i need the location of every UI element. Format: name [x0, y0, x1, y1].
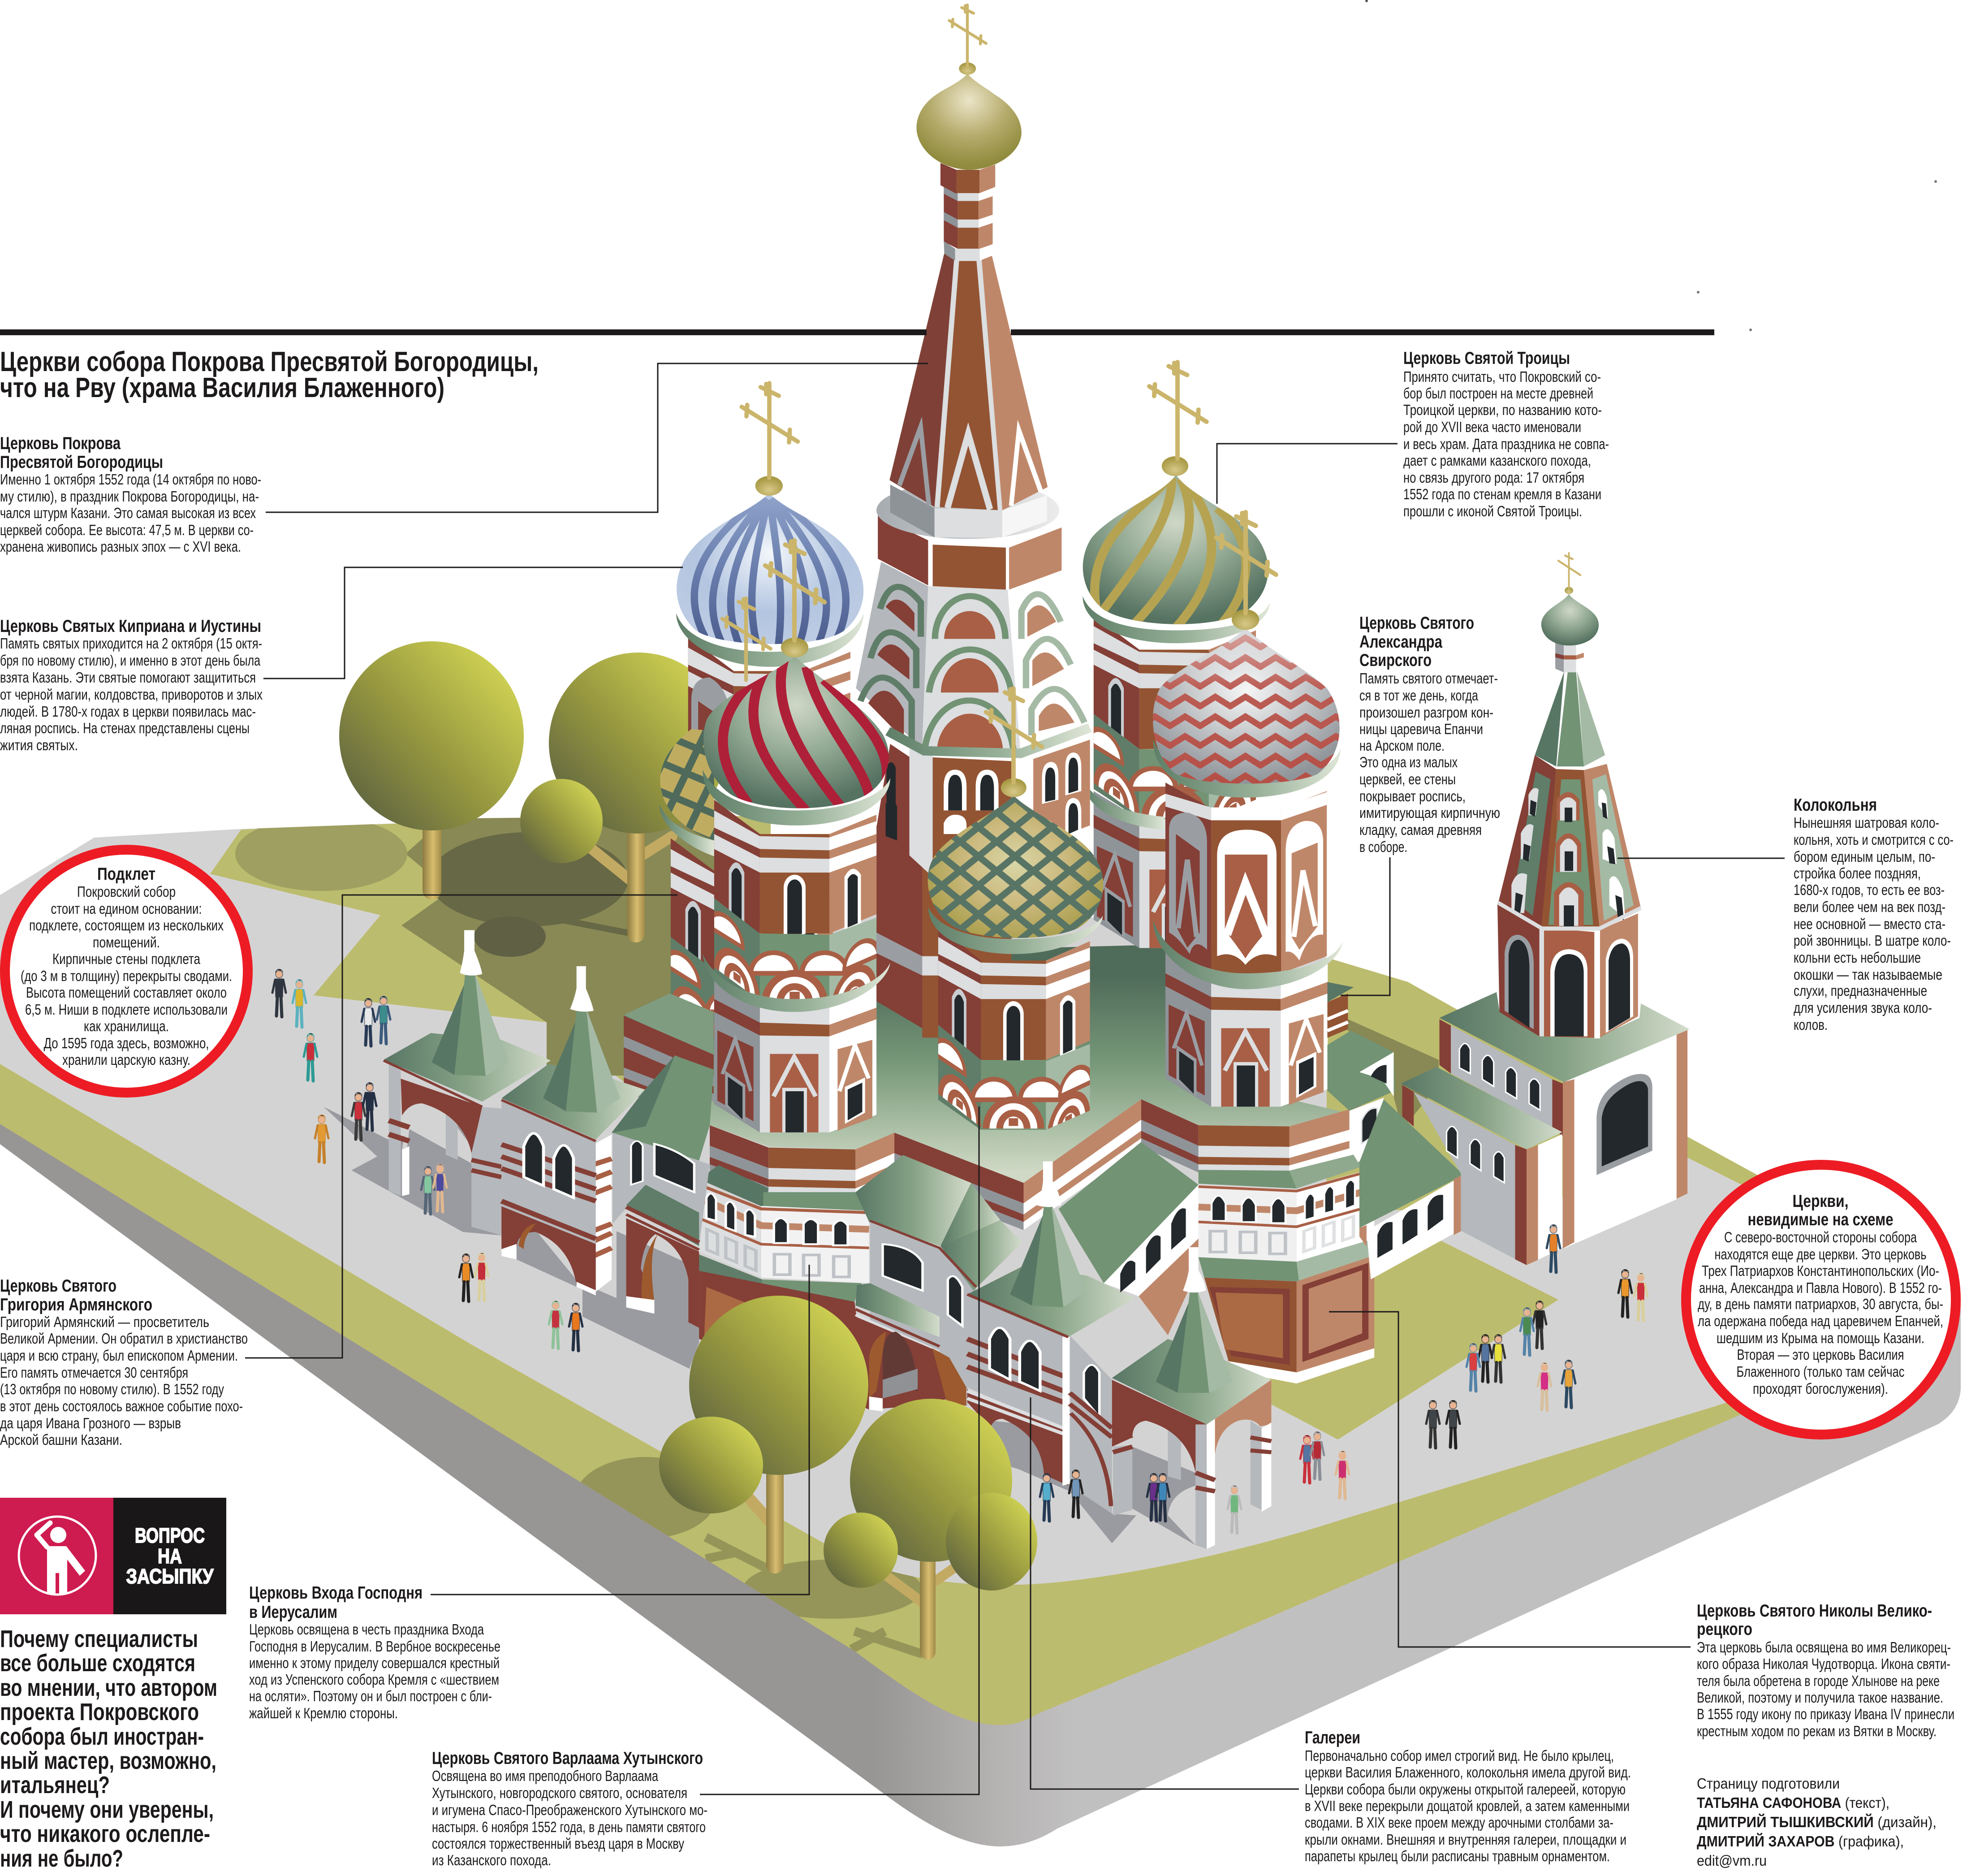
text: Church of St Gregory of Armenia: царя и всю страну, был епископом Армении. — [0, 1347, 238, 1364]
left upper brick block and roof — [624, 994, 714, 1057]
text: credits: ТАТЬЯНА САФОНОВА (текст), — [1697, 1794, 1889, 1811]
tree shadows — [235, 817, 923, 1654]
church: Intercession main tent tower — [856, 5, 1090, 1037]
porch A — [471, 1107, 501, 1236]
lawn: back left — [210, 816, 771, 1085]
text: St Alexander Svirsky: имитирующая кирпичную — [1359, 804, 1500, 821]
callout: churches not shown — [1686, 1165, 1956, 1435]
callout: churches not shown: Вторая — это церковь Василия — [1737, 1346, 1904, 1363]
specks — [1365, 0, 1368, 2]
text: Church of St Gregory of Armenia: Григорий Армянский — просветитель — [0, 1314, 209, 1330]
text: Galleries: Первоначально собор имел строгий вид. Не было крылец, — [1305, 1747, 1614, 1764]
callout: churches not shown: Блаженного (только там сейчас — [1737, 1363, 1904, 1380]
callout: churches not shown: проходят богослужения). — [1753, 1380, 1888, 1397]
title: Церкви собора Покрова Пресвятой Богородицы, — [0, 346, 539, 377]
text: St Alexander Svirsky: Память святого отмечает- — [1359, 670, 1498, 687]
octagon — [1497, 903, 1540, 1037]
text: question: ния не было? — [0, 1845, 123, 1872]
text: Holy Trinity: Церковь Святой Троицы — [1403, 349, 1570, 368]
text: Church of the Intercession: церквей собора. Ее высота: 47,5 м. В церкви со- — [0, 522, 254, 538]
text: Holy Trinity: дает с рамками казанского похода, — [1403, 452, 1591, 469]
badge: question: ВОПРОС — [135, 1524, 205, 1547]
callout: Podklet: Покровский собор — [77, 883, 176, 900]
text: question: итальянец? — [0, 1772, 110, 1798]
cross: small lattice dome — [722, 598, 771, 680]
text: Bell tower: стройка более поздняя, — [1794, 865, 1921, 882]
text: St Alexander Svirsky: Свирского — [1359, 651, 1432, 670]
lawn: front centre — [1268, 1241, 1558, 1439]
cross: blue dome — [742, 383, 798, 478]
text: St Alexander Svirsky: церквей, ее стены — [1359, 771, 1456, 787]
text: credits: Страницу подготовили — [1697, 1775, 1840, 1792]
text: Church of St Gregory of Armenia: Григория Армянского — [0, 1295, 152, 1314]
text: Bell tower: колов. — [1794, 1016, 1828, 1033]
callout: Podklet: стоит на едином основании: — [51, 900, 202, 917]
text: Church of the Intercession: хранена живопись разных эпох — с XVI века. — [0, 538, 241, 555]
text: Bell tower: слухи, предназначенные — [1794, 982, 1927, 999]
text: Church of Cyprian and Justina: от черной магии, колдовства, приворотов и злых — [0, 686, 263, 703]
bell tower: lower blocks — [1328, 903, 1690, 1279]
lawn strip — [0, 958, 1958, 1725]
paved square — [0, 819, 1958, 1585]
gallery: left wall and porch section — [613, 1133, 710, 1246]
cross: zigzag dome — [1216, 512, 1276, 614]
text: St Alexander Svirsky: произошел разгром кон- — [1359, 704, 1493, 721]
text: Church of the Intercession: Пресвятой Богородицы — [0, 453, 163, 472]
badge: question — [0, 1498, 226, 1614]
text: St Alexander Svirsky: Церковь Святого — [1359, 614, 1474, 633]
text: question: ный мастер, возможно, — [0, 1747, 216, 1774]
text: Holy Trinity: прошли с иконой Святой Троицы. — [1403, 503, 1582, 519]
text: Holy Trinity: Принято считать, что Покровский со- — [1403, 368, 1601, 385]
text: Church of the Entry into Jerusalem: жайшей к Кремлю стороны. — [249, 1705, 398, 1721]
text: Bell tower — [1794, 795, 1954, 1033]
callout: Podklet: (до 3 м в толщину) перекрыты сводами. — [21, 968, 232, 984]
title: что на Рву (храма Василия Блаженного) — [0, 372, 444, 403]
callout: Podklet: хранили царскую казну. — [62, 1051, 190, 1068]
church: lattice dome (Entry into Jerusalem front) — [928, 778, 1103, 1138]
text: Holy Trinity: бор был построен на месте древней — [1403, 385, 1593, 402]
text: Church of Cyprian and Justina: взята Казань. Эти святые помогают защититься — [0, 669, 256, 686]
text: credits — [1697, 1775, 1937, 1869]
main roof mass — [624, 942, 1344, 1183]
text: Church of the Intercession — [0, 434, 261, 555]
text: Church of St Gregory of Armenia: в этот день состоялось важное событие похо- — [0, 1398, 243, 1414]
church: small lattice dome far left — [659, 729, 835, 1050]
callout: Podklet: Подклет — [97, 865, 155, 884]
text: Church of the Entry into Jerusalem: ход из Успенского собора Кремля с «шествием — [249, 1671, 499, 1688]
badge: question: ЗАСЫПКУ — [126, 1565, 214, 1588]
text: Church of St Varlaam: состоялся торжественный въезд царя в Москву — [432, 1835, 684, 1852]
lawn: back right — [1326, 958, 1846, 1223]
text: Galleries: сводами. В XIX веке проем между арочными столбами за- — [1305, 1814, 1613, 1831]
text: Church of St Varlaam: Освящена во имя преподобного Варлаама — [432, 1768, 658, 1784]
tent tiers — [856, 562, 928, 748]
text: St Alexander Svirsky: Это одна из малых — [1359, 754, 1458, 770]
text: credits: edit@vm.ru — [1697, 1852, 1767, 1869]
tree: back centre — [520, 653, 728, 942]
text: credits: ДМИТРИЙ ТЫШКИВСКИЙ (дизайн), — [1697, 1813, 1937, 1830]
right slanted gallery — [1059, 1142, 1199, 1283]
cross: red dome — [765, 540, 824, 640]
text: St Alexander Svirsky: на Арском поле. — [1359, 737, 1445, 754]
text: Church of the Intercession: Церковь Покрова — [0, 434, 121, 453]
text: Church of St Gregory of Armenia: Арской башни Казани. — [0, 1431, 122, 1448]
text: Church of St Gregory of Armenia: Церковь Святого — [0, 1276, 116, 1296]
bell tower — [1328, 553, 1690, 1279]
text: Church of the Entry into Jerusalem: Церковь Входа Господня — [249, 1583, 423, 1603]
text: St Alexander Svirsky: кладку, самая древняя — [1359, 821, 1482, 838]
western porches with tents — [324, 930, 645, 1296]
porch B — [501, 1100, 596, 1249]
text: Church of St Nicholas: рецкого — [1697, 1620, 1752, 1639]
icon: head-scratching figure — [19, 1517, 96, 1595]
text: Church of the Entry into Jerusalem: именно к этому приделу совершался крестный — [249, 1655, 500, 1671]
text: Church of St Varlaam: настыря. 6 ноября 1552 года, в день памяти святого — [432, 1819, 706, 1835]
text: Galleries: крыли окнами. Внешняя и внутренняя галереи, площадки и — [1305, 1831, 1626, 1848]
text: Bell tower: для усиления звука коло- — [1794, 999, 1932, 1016]
text: question — [0, 1625, 217, 1872]
callout: Podklet: До 1595 года здесь, возможно, — [44, 1035, 209, 1051]
gallery: right section — [1199, 1170, 1297, 1189]
gallery: central left section — [699, 1165, 768, 1207]
front porch wall — [967, 1294, 1068, 1432]
text: Church of St Varlaam: из Казанского похода. — [432, 1852, 551, 1868]
text: question: И почему они уверены, — [0, 1796, 214, 1823]
text: Church of Cyprian and Justina: ляная роспись. На стенах представлены сцены — [0, 720, 250, 736]
text: Church of St Gregory of Armenia: Его память отмечается 30 сентября — [0, 1364, 188, 1381]
tree: back left — [339, 641, 524, 899]
church: blue dome tower (Cyprian and Justina) — [676, 476, 864, 791]
text: Church of Cyprian and Justina — [0, 617, 263, 753]
text: Church of the Entry into Jerusalem: Церковь освящена в честь праздника Входа — [249, 1621, 484, 1638]
building shadow on lawn — [401, 816, 717, 1076]
title — [0, 346, 539, 403]
text: Church of the Intercession: Именно 1 октября 1552 года (14 октября по ново- — [0, 471, 261, 488]
gallery: centre roofs and porch wall — [870, 1222, 976, 1406]
text: Galleries: церкви Василия Блаженного, колокольня имела другой вид. — [1305, 1764, 1631, 1781]
text: Church of the Intercession: чался штурм Казани. Это самая высокая из всех — [0, 505, 256, 521]
text: St Alexander Svirsky — [1359, 614, 1500, 855]
heading rule — [0, 329, 1714, 335]
text: St Alexander Svirsky: Александра — [1359, 632, 1442, 652]
brick band under collar — [878, 516, 928, 585]
text: St Alexander Svirsky: в соборе. — [1359, 839, 1407, 855]
church: Holy Trinity tower — [1083, 456, 1270, 948]
tent lower section — [856, 482, 1090, 1037]
text: Church of the Entry into Jerusalem: Господня в Иерусалим. В Вербное воскресенье — [249, 1638, 500, 1655]
text: question: что никакого ослепле- — [0, 1820, 210, 1847]
text: Church of Cyprian and Justina: Церковь Святых Киприана и Иустины — [0, 617, 261, 636]
text: St Alexander Svirsky: ся в тот же день, когда — [1359, 687, 1478, 704]
text: credits: ДМИТРИЙ ЗАХАРОВ (графика), — [1697, 1833, 1904, 1850]
callout: Podklet: 6,5 м. Ниши в подклете использовали — [25, 1001, 228, 1018]
text: Church of the Entry into Jerusalem: на осляти». Поэтому он и был построен с бли- — [249, 1688, 492, 1704]
callout: Podklet: Высота помещений составляет около — [26, 984, 227, 1001]
text: Galleries: Галереи — [1305, 1728, 1360, 1747]
callout: Podklet: подклете, состоящем из нескольких — [29, 917, 224, 934]
text: Church of the Entry into Jerusalem — [249, 1583, 500, 1721]
text: Church of St Nicholas — [1697, 1601, 1954, 1739]
church: red-striped dome (St Gregory) — [703, 638, 890, 1133]
text: Church of the Entry into Jerusalem: в Иерусалим — [249, 1603, 337, 1622]
text: Church of Cyprian and Justina: людей. В 1780-х годах в церкви появилась мас- — [0, 703, 256, 720]
callout: Podklet: помещений. — [93, 934, 160, 951]
callout: Podklet: Кирпичные стены подклета — [52, 951, 201, 967]
text: question: все больше сходятся — [0, 1650, 195, 1677]
text: question: Почему специалисты — [0, 1625, 198, 1652]
text: Galleries: парапеты крылец были расписаны травным орнаментом. — [1305, 1848, 1610, 1864]
bell tower: upper tent, dome, cross — [1498, 553, 1641, 929]
callout: Podklet — [5, 850, 248, 1093]
text: Bell tower: Колокольня — [1794, 795, 1877, 815]
text: question: собора был иностран- — [0, 1723, 204, 1750]
text: Holy Trinity: Троицкой церкви, по названию кото- — [1403, 402, 1602, 418]
ground shadow along front porch — [971, 1417, 1136, 1543]
cathedral lower galleries, porches and roofs — [582, 994, 1374, 1549]
text: Church of St Varlaam: Хутынского, новгородского святого, основателя — [432, 1785, 687, 1801]
badge: question: НА — [158, 1544, 182, 1568]
callout: churches not shown: Церкви, — [1792, 1192, 1849, 1211]
text: Bell tower: кольни есть небольшие — [1794, 949, 1921, 966]
text: St Alexander Svirsky: покрывает роспись, — [1359, 788, 1466, 804]
leader lines — [245, 363, 1785, 1794]
cornice walls — [710, 1125, 768, 1195]
text: Holy Trinity: 1552 года по стенам кремля в Казани — [1403, 486, 1601, 502]
spire and top dome — [889, 62, 1048, 510]
text: question: проекта Покровского — [0, 1699, 199, 1725]
text: Galleries — [1305, 1728, 1631, 1864]
tent 2 porch — [1112, 1339, 1271, 1424]
text: Holy Trinity: и весь храм. Дата праздника не совпа- — [1403, 436, 1609, 452]
text: Holy Trinity — [1403, 349, 1609, 519]
white pillar — [582, 1144, 595, 1292]
callout: Podklet: как хранилища. — [84, 1018, 169, 1034]
text: St Alexander Svirsky: ницы царевича Епанчи — [1359, 721, 1483, 737]
text: Church of St Gregory of Armenia: да царя Ивана Грозного — взрыв — [0, 1415, 181, 1431]
text: Church of St Varlaam: Церковь Святого Варлаама Хутынского — [432, 1749, 703, 1768]
text: Church of Cyprian and Justina: бря по новому стилю), и именно в этот день была — [0, 652, 260, 669]
callout: churches not shown: невидимые на схеме — [1747, 1210, 1894, 1229]
text: Church of the Intercession: му стилю), в праздник Покрова Богородицы, на- — [0, 488, 259, 505]
text: Church of St Gregory of Armenia: (13 октября по новому стилю). В 1552 году — [0, 1381, 224, 1397]
text: Galleries: Церкви собора были окружены открытой галереей, которую — [1305, 1781, 1626, 1798]
text: Church of St Varlaam: и игумена Спасо-Преображенского Хутынского мо- — [432, 1802, 707, 1818]
visitors on the square — [272, 969, 1648, 1533]
text: Holy Trinity: рой до XVII века часто именовали — [1403, 419, 1581, 435]
text: Holy Trinity: но связь другого рода: 17 октября — [1403, 469, 1584, 486]
text: Church of St Varlaam — [432, 1749, 707, 1868]
text: Church of St Gregory of Armenia — [0, 1276, 248, 1448]
cross: main — [949, 5, 986, 67]
cross: lattice dome — [986, 688, 1042, 783]
text: Church of Cyprian and Justina: жития святых. — [0, 737, 78, 753]
text: question: во мнении, что автором — [0, 1674, 217, 1701]
text: Church of Cyprian and Justina: Память святых приходится на 2 октября (15 октя- — [0, 635, 262, 652]
church: zigzag dome (St Alexander Svirsky) — [1153, 609, 1343, 1107]
platform side walls — [0, 895, 1961, 1846]
cross: Holy Trinity dome — [1149, 362, 1207, 459]
tent 1 roof — [967, 1267, 1135, 1337]
text: Church of St Gregory of Armenia: Великой Армении. Он обратил в христианство — [0, 1330, 248, 1347]
text: Galleries: в XVII веке перекрыли дощатой кровлей, а затем каменными — [1305, 1798, 1630, 1814]
front trees — [659, 1296, 1037, 1660]
